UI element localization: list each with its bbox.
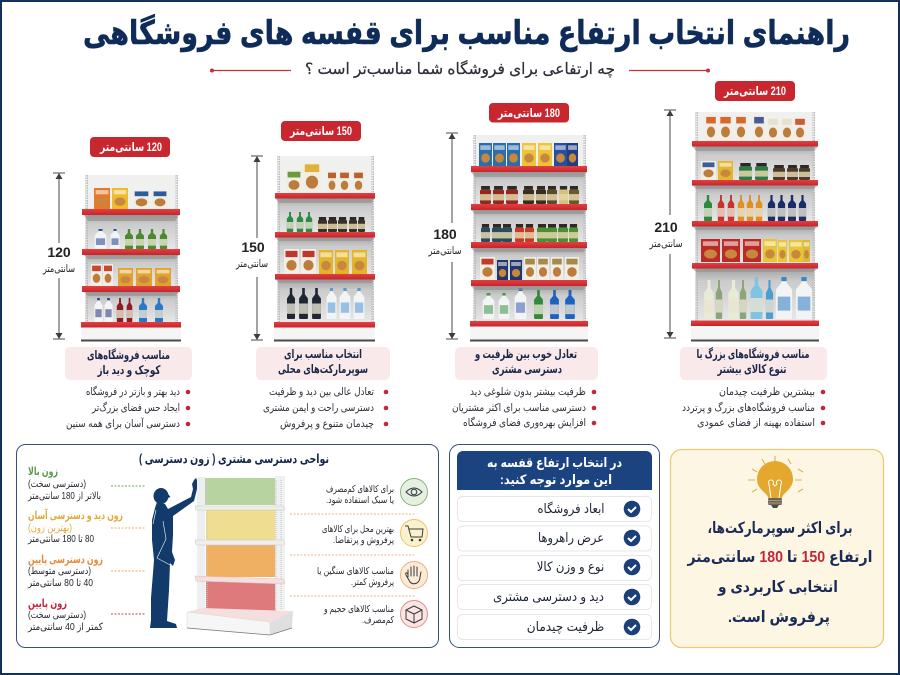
card heading 210 <box>680 346 827 380</box>
recommendation text <box>687 520 872 627</box>
recommendation text: انتخابی کاربردی و <box>717 579 838 596</box>
usage note: eye-level zone <box>322 520 428 546</box>
usage note: bottom zone: کم‌مصرف. <box>362 615 394 626</box>
zone: top: بالاتر از 180 سانتی‌متر <box>27 491 101 502</box>
row separators <box>290 514 415 596</box>
height dimension 210: سانتی‌متر <box>649 238 682 250</box>
checklist row: product type and weight: نوع و وزن کالا <box>537 559 604 575</box>
size badge 150: 150 سانتی‌متر <box>289 124 352 138</box>
card heading 150: انتخاب مناسب برای <box>284 347 362 361</box>
card heading 120: کوچک و دید باز <box>97 363 161 378</box>
height dimension 120 <box>42 173 75 339</box>
size badge 150 <box>281 121 361 141</box>
column: 210 cm shelf <box>649 81 827 429</box>
zone: eye level: زون دید و دسترسی آسان <box>28 508 123 522</box>
usage note: top zone: یا سبک استفاده شود. <box>326 495 394 506</box>
checklist row: store dimensions: ابعاد فروشگاه <box>538 501 604 517</box>
zone: low access <box>27 554 145 589</box>
card heading 210: مناسب فروشگاه‌های بزرگ با <box>696 346 810 362</box>
panel: checklist <box>450 444 660 648</box>
zone: low access: 40 تا 80 سانتی‌متر <box>27 578 93 589</box>
shelf unit 210 <box>691 112 819 342</box>
benefits list 120: دسترسی آسان برای همه سنین <box>66 417 180 430</box>
checklist header: این موارد توجه کنید: <box>500 472 612 487</box>
height dimension 210: 210 <box>654 219 678 235</box>
benefits list 150 <box>263 386 388 430</box>
size badge 120 <box>90 137 170 157</box>
benefits list 120 <box>66 385 190 430</box>
checklist header <box>457 451 652 490</box>
benefits list 180: دسترسی مناسب برای اکثر مشتریان <box>452 402 586 414</box>
checklist row: display capacity: ظرفیت چیدمان <box>527 619 604 635</box>
size badge 180 <box>489 103 569 122</box>
zone: eye level: 80 تا 180 سانتی‌متر <box>27 534 94 545</box>
zone: bottom <box>27 598 145 633</box>
panel: customer access zones <box>16 444 438 648</box>
usage note: low zone <box>317 562 428 588</box>
benefits list 120: دید بهتر و بازتر در فروشگاه <box>86 385 180 398</box>
recommendation text: پرفروش است. <box>728 609 830 627</box>
size badge 210 <box>715 81 795 101</box>
zone: bottom: زون پایین <box>28 598 67 610</box>
usage note: low zone: مناسب کالاهای سنگین یا <box>317 565 394 577</box>
zone: low access: زون دسترسی پایین <box>28 554 103 566</box>
benefits list 210 <box>682 386 825 429</box>
checklist header: در انتخاب ارتفاع قفسه به <box>487 455 622 470</box>
column: 150 cm shelf <box>235 121 390 430</box>
column: 180 cm shelf <box>428 103 598 429</box>
zone: top: (دسترسی سخت) <box>28 479 86 490</box>
subtitle with side rules <box>210 60 710 79</box>
card heading 180 <box>455 347 598 380</box>
usage note: bottom zone <box>323 600 428 628</box>
shelf unit 120 <box>81 175 181 342</box>
benefits list 180 <box>452 386 596 429</box>
panel: recommendation callout <box>670 450 884 648</box>
benefits list 210: مناسب فروشگاه‌های بزرگ و پرتردد <box>682 400 815 414</box>
card heading 210: تنوع کالای بیشتر <box>717 362 786 377</box>
benefits list 150: دسترسی راحت و ایمن مشتری <box>263 402 374 414</box>
checklist row: visibility and access <box>458 584 652 610</box>
benefits list 180: ظرفیت بیشتر بدون شلوغی دید <box>470 386 586 398</box>
card heading 150: سوپرمارکت‌های محلی <box>278 362 368 377</box>
benefits list 120: ایجاد حس فضای بزرگ‌تر <box>91 400 180 414</box>
shelf unit 180 <box>470 135 588 342</box>
height dimension 180: 180 <box>433 226 457 242</box>
benefits list 210: بیشترین ظرفیت چیدمان <box>719 386 815 398</box>
usage note: eye-level zone: پرفروش و پرتقاضا. <box>333 535 394 546</box>
zone: bottom: (دسترسی سخت) <box>28 610 86 621</box>
height dimension 210 <box>649 110 682 338</box>
card heading 180: دسترسی مشتری <box>492 362 562 376</box>
subtitle with side rules: چه ارتفاعی برای فروشگاه شما مناسب‌تر است ؟ <box>305 60 615 79</box>
figure: person reaching <box>150 478 198 628</box>
zone: low access: (دسترسی متوسط) <box>28 566 91 577</box>
height dimension 180: سانتی‌متر <box>428 245 462 257</box>
panel heading: نواحی دسترسی مشتری ( زون دسترسی ) <box>139 452 329 466</box>
usage note: bottom zone: مناسب کالاهای حجیم و <box>323 604 394 615</box>
usage note: top zone: برای کالاهای کم‌مصرف <box>326 484 394 495</box>
usage note: eye-level zone: بهترین محل برای کالاهای <box>322 524 394 535</box>
benefits list 180: افزایش بهره‌وری فضای فروشگاه <box>463 416 586 429</box>
usage note: top zone <box>326 478 428 506</box>
checklist row: visibility and access: دید و دسترسی مشتری <box>493 589 604 605</box>
height dimension 150 <box>235 156 268 340</box>
checklist row: product type and weight <box>458 556 652 580</box>
shelf unit 150 <box>274 156 375 342</box>
zone: bottom: کمتر از 40 سانتی‌متر <box>27 622 103 633</box>
height dimension 150: 150 <box>241 239 265 255</box>
recommendation text: برای اکثر سوپرمارکت‌ها، <box>708 520 852 538</box>
benefits list 210: استفاده بهینه از فضای عمودی <box>697 417 815 429</box>
zone: eye level: (بهترین زون) <box>28 523 72 534</box>
checklist row: aisle width: عرض راهروها <box>538 530 604 546</box>
card heading 120 <box>65 347 192 380</box>
zone: top <box>27 466 145 502</box>
size badge 120: 120 سانتی‌متر <box>99 140 162 154</box>
card heading 120: مناسب فروشگاه‌های <box>87 348 170 363</box>
column: 120 cm shelf <box>42 137 192 430</box>
card heading 180: تعادل خوب بین ظرفیت و <box>474 347 577 362</box>
zone: eye level <box>27 508 145 545</box>
benefits list 150: تعادل عالی بین دید و ظرفیت <box>269 386 374 398</box>
checklist row: display capacity <box>458 614 652 640</box>
card heading 150 <box>256 347 390 380</box>
benefits list 150: چیدمان متنوع و پرفروش <box>280 418 374 430</box>
height dimension 180 <box>428 133 462 339</box>
size badge 210: 210 سانتی‌متر <box>723 84 786 98</box>
checklist row: aisle width <box>458 526 652 551</box>
figure: zoned gondola shelf <box>187 476 293 635</box>
usage note: low zone: پرفروش کمتر. <box>351 577 394 588</box>
size badge 180: 180 سانتی‌متر <box>497 106 560 120</box>
zone: top: زون بالا <box>28 466 58 478</box>
checklist row: store dimensions <box>458 496 652 522</box>
icon: light bulb <box>748 456 803 508</box>
height dimension 150: سانتی‌متر <box>235 258 268 270</box>
recommendation text: ارتفاع 150 تا 180 سانتی‌متر <box>687 549 872 566</box>
height dimension 120: 120 <box>47 244 71 260</box>
height dimension 120: سانتی‌متر <box>42 263 75 275</box>
